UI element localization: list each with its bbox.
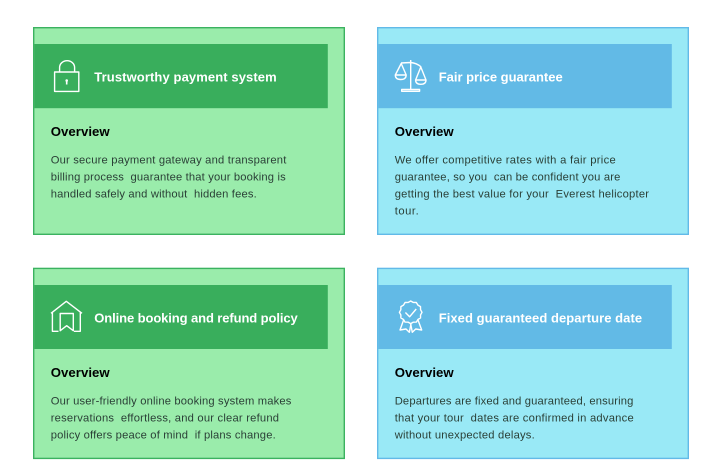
- body text: guarantee, so you can be confident you are: [395, 171, 620, 183]
- body text: [395, 154, 649, 217]
- card background: [378, 28, 688, 234]
- card background: [34, 268, 344, 458]
- body text: getting the best value for your Everest helicopter: [395, 188, 649, 200]
- header bar: [34, 285, 328, 349]
- card background: [34, 28, 344, 234]
- header bar: [34, 44, 328, 108]
- header bar: [378, 285, 672, 349]
- heading: Trustworthy payment system: [94, 69, 277, 84]
- header bar: [378, 44, 672, 108]
- card background: [378, 268, 688, 458]
- body text: Our secure payment gateway and transparent: [51, 154, 287, 166]
- body text: that your tour dates are confirmed in advance: [395, 412, 634, 424]
- panel: online booking and refund policy: [34, 268, 344, 458]
- body text: Our user-friendly online booking system makes: [51, 395, 292, 407]
- body text: without unexpected delays.: [394, 429, 535, 441]
- heading: Fair price guarantee: [439, 69, 563, 84]
- body text: reservations effortless, and our clear refund: [51, 412, 279, 424]
- body text: [51, 395, 292, 441]
- panel: fixed guaranteed departure date: [378, 268, 688, 458]
- overview label: Overview: [51, 124, 110, 139]
- heading: Online booking and refund policy: [94, 310, 298, 325]
- panel: trustworthy payment system: [34, 28, 344, 234]
- body text: We offer competitive rates with a fair price: [395, 154, 616, 166]
- panel: fair price guarantee: [378, 28, 688, 234]
- body text: [51, 154, 287, 200]
- icon: padlock: [55, 61, 79, 91]
- body text: Departures are fixed and guaranteed, ensuring: [395, 395, 633, 407]
- icon: house with bookmark: [51, 301, 82, 331]
- body text: tour.: [395, 205, 419, 217]
- body text: [394, 395, 634, 441]
- overview label: Overview: [395, 365, 454, 380]
- body text: billing process guarantee that your booking is: [51, 171, 286, 183]
- icon: award rosette: [399, 301, 422, 332]
- overview label: Overview: [395, 124, 454, 139]
- heading: Fixed guaranteed departure date: [439, 310, 642, 325]
- overview label: Overview: [51, 365, 110, 380]
- icon: balance scale: [395, 60, 426, 91]
- body text: handled safely and without hidden fees.: [51, 188, 257, 200]
- body text: policy offers peace of mind if plans change.: [51, 429, 276, 441]
